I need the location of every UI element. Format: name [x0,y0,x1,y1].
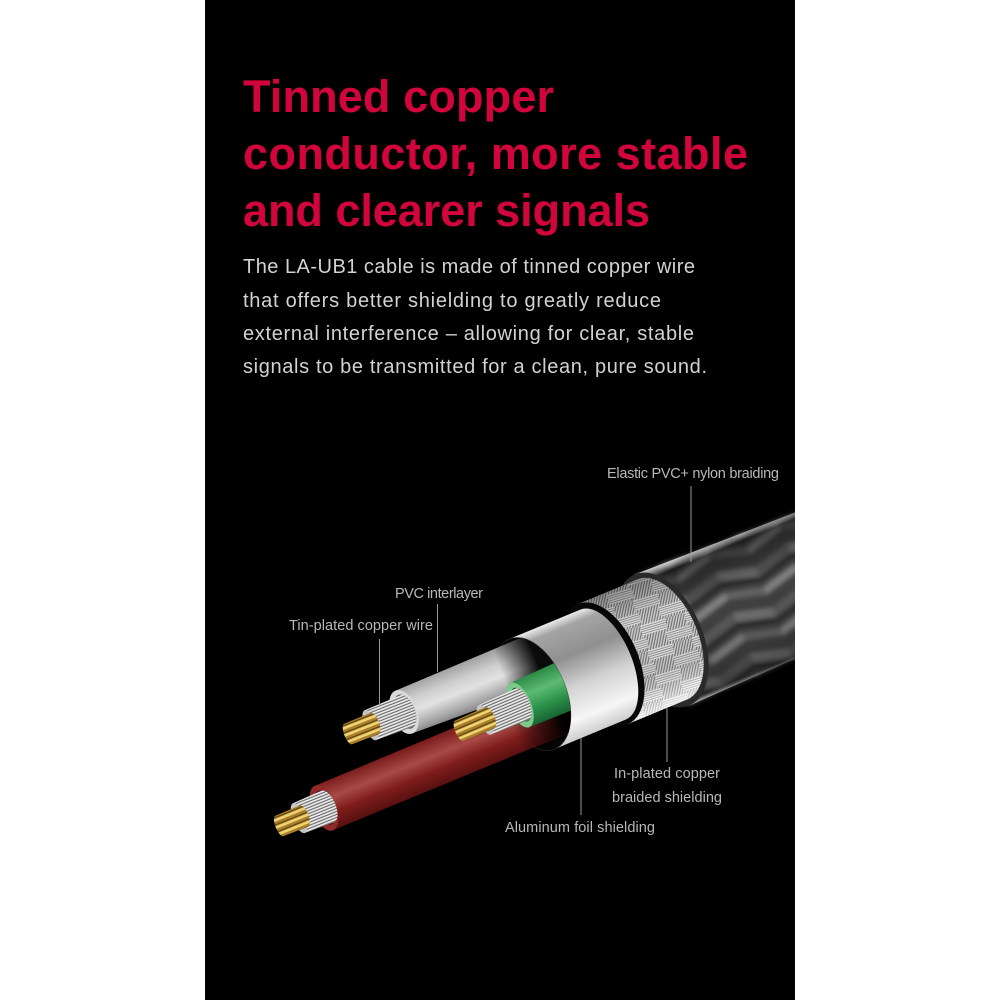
label: aluminum foil shielding: Aluminum foil shielding [505,820,655,836]
body text [243,256,707,378]
label: in-plated copper braided shielding [612,707,722,806]
conductors emerging from the foil [274,638,571,836]
red insulated wire [274,711,571,836]
heading [243,71,748,236]
black background panel [205,0,795,1000]
heading: and clearer signals [243,185,650,236]
cable illustration [274,510,795,836]
label: in-plated copper braided shielding: braided shielding [612,790,722,806]
label: elastic PVC + nylon braiding: Elastic PVC+ nylon braiding [607,466,779,482]
heading: conductor, more stable [243,128,748,179]
outer nylon braiding jacket [622,510,795,708]
heading: Tinned copper [243,71,554,122]
label: in-plated copper braided shielding: In-plated copper [614,766,720,782]
green insulated wire [454,663,570,741]
white insulated wire [342,638,558,744]
aluminum foil shielding [500,608,638,751]
label: PVC interlayer: PVC interlayer [395,586,483,602]
tin-plated copper braided shielding [578,578,704,724]
body text: external interference – allowing for clear, stable [243,323,694,345]
body text: The LA-UB1 cable is made of tinned copper wire [243,256,695,278]
label: tin-plated copper wire: Tin-plated copper wire [289,618,433,634]
label: PVC interlayer [395,586,483,672]
body text: signals to be transmitted for a clean, pure sound. [243,356,707,378]
body text: that offers better shielding to greatly reduce [243,290,661,312]
